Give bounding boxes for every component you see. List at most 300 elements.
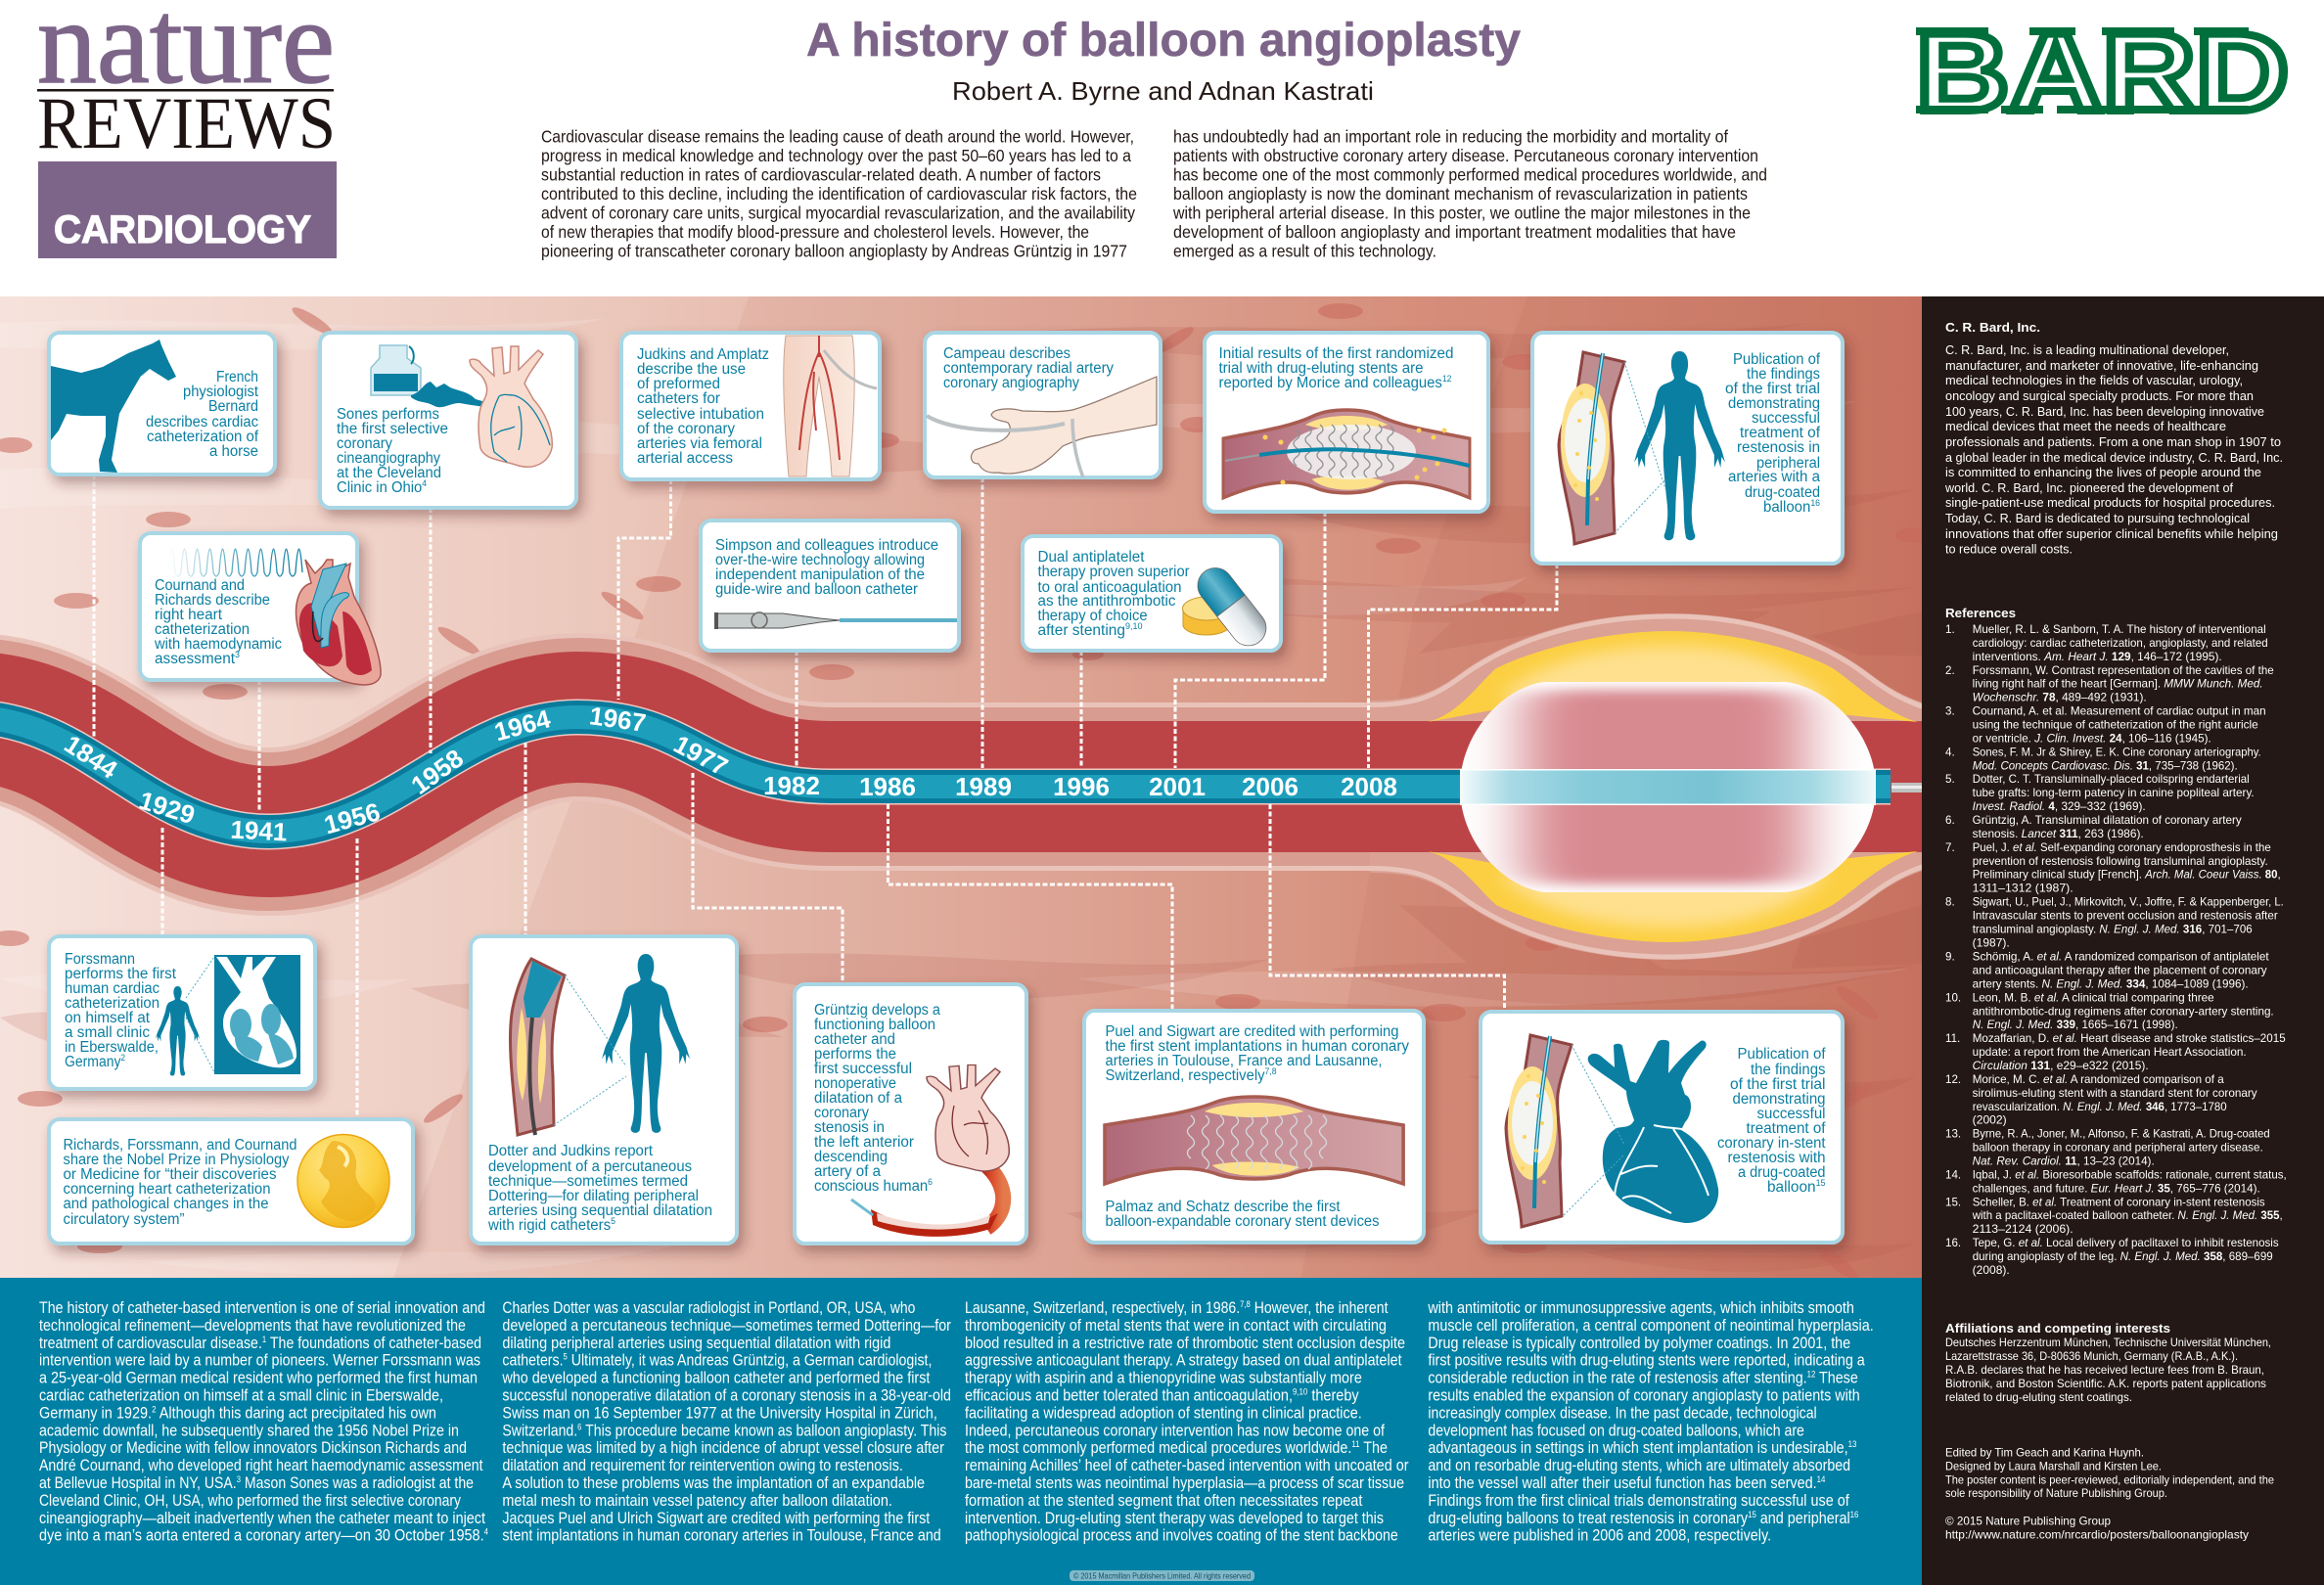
text: Sones caption: coronary <box>337 435 392 452</box>
text: editorial credits <box>1945 1446 2274 1500</box>
text column 4: advantageous in settings in which stent implantation is undesirable, <box>1428 1439 1909 1457</box>
text: Cournand caption: assessment <box>155 651 236 667</box>
text: company profile: medical devices that meet the needs of healthcare <box>1945 420 2226 433</box>
text: Cournand caption: catheterization <box>155 621 250 638</box>
text column 4: considerable reduction in the rate of restenosis after stenting. <box>1428 1370 1865 1387</box>
text: Simpson caption <box>715 537 938 598</box>
text column 2: Swiss man on 16 September 1977 at the University Hospital in Zürich, <box>502 1404 937 1422</box>
text: Morice caption: Initial results of the first randomized <box>1219 345 1454 362</box>
icon: vessel with drug-coated balloon <box>1506 1035 1572 1227</box>
text: Cournand caption: with haemodynamic <box>154 636 282 653</box>
text column 1: at Bellevue Hospital in NY, USA. <box>39 1474 270 1492</box>
title: A history of balloon angioplasty <box>806 15 1521 67</box>
reference list: Schömig, A. et al. A randomized comparison of antiplatelet <box>1973 951 2269 963</box>
text: copyright and URL: © 2015 Nature Publishing Group <box>1945 1515 2111 1528</box>
timeline year labels <box>59 701 1397 847</box>
text: Grüntzig caption: functioning balloon <box>814 1017 935 1033</box>
text: Grüntzig caption: the left anterior <box>814 1134 914 1151</box>
panel: 2006 coronary drug-coated balloon <box>1481 1012 1843 1243</box>
text: introduction: contributed to this decline, including the identification of cardiovascular risk factors, the <box>541 184 1137 204</box>
reference list: (2008). <box>1973 1264 2010 1277</box>
reference list: 6. <box>1945 814 1955 827</box>
text: Sones caption: the first selective <box>337 421 448 437</box>
text: Forssmann caption: a small clinic <box>65 1024 150 1041</box>
text column 1: Mason Sones was a radiologist at the <box>241 1474 474 1492</box>
text: peripheral trial caption: balloon <box>1763 499 1812 516</box>
text: peripheral trial caption: treatment of <box>1740 425 1821 441</box>
timeline year labels: 1996 <box>1053 772 1110 801</box>
text: company profile: Today, C. R. Bard is dedicated to pursuing technological <box>1945 512 2250 525</box>
text: company profile <box>1944 343 2283 556</box>
text: Sones caption: Sones performs <box>337 406 439 423</box>
text column 2: technique was limited by a high incidence of abrupt vessel closure after <box>502 1439 944 1457</box>
artery vessel with lipid plaque <box>0 613 1928 960</box>
panel: 2008 peripheral drug-coated balloon <box>1532 333 1843 564</box>
icon: heart with balloon catheter <box>851 1065 1009 1237</box>
reference list: 5. <box>1945 773 1955 786</box>
text column 4: These <box>1815 1370 1858 1387</box>
text: Morice caption: reported by Morice and colleagues <box>1219 375 1451 391</box>
text column 2: Charles Dotter was a vascular radiologist in Portland, OR, USA, who <box>502 1299 915 1317</box>
text: peripheral trial caption: the findings <box>1747 366 1820 383</box>
text column 3: Lausanne, Switzerland, respectively, in 1986. <box>965 1299 1288 1317</box>
text column 4: 16 <box>1850 1510 1858 1519</box>
panel: 1941 Cournand and Richards <box>140 533 381 685</box>
reference list: 15. <box>1945 1196 1961 1208</box>
text: peripheral trial caption: of the first trial <box>1725 381 1820 397</box>
dotted leader lines <box>186 957 214 1072</box>
reference list: with a paclitaxel-coated balloon catheter. N. Engl. J. Med. 355, <box>1972 1209 2283 1222</box>
timeline connector lines <box>94 475 1557 1119</box>
text: affiliations: related to drug-eluting stent coatings. <box>1945 1391 2132 1404</box>
text column 3: Indeed, percutaneous coronary intervention has now become one of <box>965 1422 1385 1439</box>
text: dual antiplatelet caption: after stenting <box>1037 622 1125 639</box>
text: Dotter caption: arteries using sequential dilatation <box>488 1202 712 1219</box>
text: company profile: manufacturer, and marketer of innovative, life-enhancing <box>1945 359 2258 373</box>
text: Dotter caption <box>487 1143 712 1234</box>
text: introduction <box>541 127 1767 260</box>
reference list: Sigwart, U., Puel, J., Mirkovitch, V., Joffre, F. & Kappenberger, L. <box>1973 896 2284 909</box>
timeline year labels: 1977 <box>669 729 733 782</box>
text: company profile: to reduce overall costs. <box>1945 542 2073 556</box>
reference list: Sones, F. M. Jr & Shirey, E. K. Cine coronary arteriography. <box>1973 746 2261 758</box>
text column 3: 11 <box>1351 1439 1360 1449</box>
text: dual antiplatelet caption: as the antithrombotic <box>1037 593 1176 610</box>
text column 2: 5 <box>564 1352 568 1362</box>
reference list: 3. <box>1945 705 1955 718</box>
text: company profile: is committed to enhancing the lives of people around the <box>1945 466 2261 479</box>
text: Sones caption: cineangiography <box>337 450 440 467</box>
text column 1: 1 <box>262 1335 266 1344</box>
heading: C. R. Bard, Inc.: C. R. Bard, Inc. <box>1945 320 2040 335</box>
text column 1: André Cournand, who developed right heart haemodynamic assessment <box>39 1457 483 1474</box>
text: Forssmann caption: catheterization <box>65 995 159 1012</box>
reference list: prevention of restenosis following transluminal angioplasty. <box>1973 855 2268 868</box>
logo: Nature Reviews Cardiology: REVIEWS <box>37 83 336 164</box>
dotted leader lines <box>554 975 626 1125</box>
text: Judkins caption: catheters for <box>637 390 720 407</box>
text: company profile: world. C. R. Bard, Inc. pioneered the development of <box>1944 481 2234 495</box>
panel: dark sidebar <box>1922 296 2324 1585</box>
reference list <box>1945 623 2287 1277</box>
text: Judkins caption: arteries via femoral <box>637 435 762 452</box>
panel: 2001 Morice drug-eluting stents <box>1205 333 1488 512</box>
icon: vessel with drug-eluting stent <box>1223 410 1470 498</box>
text: horse caption: catheterization of <box>147 429 259 445</box>
text: introduction: balloon angioplasty is now the dominant mechanism of revascularization in patients <box>1173 184 1748 204</box>
text: peripheral trial caption: peripheral <box>1756 455 1820 472</box>
text: introduction: of new therapies that modify blood-pressure and cholesterol levels. However, the <box>541 222 1089 242</box>
text: Grüntzig caption: 6 <box>928 1177 933 1187</box>
text column 2: Jacques Puel and Ulrich Sigwart are credited with performing the first <box>502 1510 931 1527</box>
text: Cournand caption: Richards describe <box>155 592 270 609</box>
reference list: transluminal angioplasty. N. Engl. J. Med. 316, 701–706 <box>1973 924 2253 935</box>
text column 3: blood resulted in a restrictive rate of thrombotic stent occlusion despite <box>965 1335 1405 1352</box>
panel: 1977 Grüntzig <box>795 984 1026 1244</box>
text: Grüntzig caption <box>814 1002 940 1195</box>
text column 4: arteries were published in 2006 and 2008, respectively. <box>1428 1527 1771 1545</box>
text column 3: However, the inherent <box>1251 1299 1389 1317</box>
text: copyright and URL: http://www.nature.com/nrcardio/posters/balloonangioplasty <box>1945 1528 2249 1542</box>
reference list: Wochenschr. 78, 489–492 (1931). <box>1973 692 2147 704</box>
timeline year labels: 1958 <box>405 744 469 800</box>
panel: 1967 Judkins and Amplatz <box>621 333 880 479</box>
text: Grüntzig caption: dilatation of a <box>814 1090 902 1107</box>
text column 4: 14 <box>1817 1474 1825 1484</box>
heading: Affiliations and competing interests: Affiliations and competing interests <box>1945 1321 2170 1336</box>
panel: 1958 Sones cineangiography <box>320 333 576 508</box>
text: Grüntzig caption: catheter and <box>814 1031 895 1048</box>
panel: 1844 horse catheterization <box>49 333 275 475</box>
text column 3: 7,8 <box>1240 1299 1251 1309</box>
text column 1: a 25-year-old German medical resident who performed the first human <box>39 1370 478 1387</box>
text: Nobel caption: concerning heart catheterization <box>63 1181 270 1198</box>
text column 1: cineangiography—albeit inadvertently when the catheter meant to inject <box>39 1510 485 1527</box>
dotted leader lines <box>1615 362 1665 533</box>
reference list: 13. <box>1945 1128 1961 1141</box>
text: introduction: substantial reduction in rates of cardiovascular-related death. A number of factors <box>541 164 1101 184</box>
text column 4: drug-eluting balloons to treat restenosis in coronary <box>1428 1510 1796 1527</box>
text: coronary trial caption: successful <box>1757 1106 1826 1122</box>
reference list: Invest. Radiol. 4, 329–332 (1969). <box>1973 800 2146 813</box>
panel: main body text <box>0 1278 1922 1585</box>
reference list: 1. <box>1945 623 1955 636</box>
text: peripheral trial caption: drug-coated <box>1745 484 1820 501</box>
text: coronary trial caption: restenosis with <box>1728 1150 1826 1166</box>
reference list: Morice, M. C. et al. A randomized comparison of a <box>1973 1073 2224 1086</box>
text column 3: pathophysiological process and involves coating of the stent backbone <box>965 1527 1398 1545</box>
text: peripheral trial caption: successful <box>1752 410 1820 427</box>
icon: small human silhouette <box>156 986 200 1075</box>
inflated balloon <box>1460 682 1876 892</box>
timeline year labels: 2001 <box>1149 772 1206 801</box>
text: company profile: C. R. Bard, Inc. is a leading multinational developer, <box>1945 343 2229 357</box>
icon: vessel with rigid catheter <box>510 959 565 1135</box>
timeline year labels: 1941 <box>230 815 288 847</box>
text: Puel caption <box>1106 1023 1409 1230</box>
text: introduction: has become one of the most commonly performed medical procedures worldwide, and <box>1173 164 1767 184</box>
text: Judkins caption <box>637 346 769 467</box>
text: dual antiplatelet caption: therapy of choice <box>1037 608 1147 624</box>
dotted leader lines <box>1564 1045 1624 1215</box>
text column 1: 3 <box>237 1474 241 1484</box>
text: Dotter caption: 5 <box>611 1216 615 1226</box>
panel: 1929 Forssmann <box>49 936 315 1089</box>
text: coronary trial caption: balloon <box>1767 1179 1816 1196</box>
panel: 1986 Puel and Sigwart <box>1084 1011 1424 1243</box>
text: Grüntzig caption: Grüntzig develops a <box>814 1002 940 1019</box>
text: horse caption: French <box>216 369 258 385</box>
text column 3: efficacious and better tolerated than anticoagulation, <box>965 1387 1339 1405</box>
text: Forssmann caption: Forssmann <box>65 951 135 968</box>
reference list: 2. <box>1945 664 1955 677</box>
text column 4: 15 <box>1748 1510 1756 1519</box>
text: introduction: patients with obstructive coronary artery disease. Percutaneous coronary intervention <box>1173 146 1758 165</box>
text: Puel caption: balloon-expandable coronary stent devices <box>1106 1213 1380 1230</box>
text: introduction: pioneering of transcatheter coronary balloon angioplasty by Andreas Grüntzig in 1977 <box>541 241 1127 260</box>
text: coronary trial caption: coronary in-stent <box>1717 1135 1826 1152</box>
timeline year labels: 2006 <box>1242 772 1299 801</box>
text: horse caption: a horse <box>209 443 258 460</box>
text: horse caption <box>146 369 259 460</box>
reference list: balloon therapy in coronary and peripheral artery disease. <box>1973 1142 2263 1155</box>
reference list: (2002) <box>1973 1114 2007 1127</box>
reference list: (1987). <box>1973 936 2010 949</box>
text: editorial credits: sole responsibility of Nature Publishing Group. <box>1945 1487 2167 1500</box>
text: affiliations: Lazarettstrasse 36, D-80636 Munich, Germany (R.A.B., A.K.). <box>1945 1350 2238 1363</box>
reference list: Mueller, R. L. & Sanborn, T. A. The history of interventional <box>1973 623 2266 636</box>
reference list: during angioplasty of the leg. N. Engl. J. Med. 358, 689–699 <box>1973 1250 2273 1263</box>
text: dual antiplatelet caption: Dual antiplatelet <box>1037 549 1145 566</box>
reference list: using the technique of catheterization of the right auricle <box>1973 718 2258 732</box>
reference list: update: a report from the American Heart Association. <box>1973 1046 2247 1059</box>
timeline year labels: 1967 <box>588 701 648 738</box>
icon: heart X-ray inset <box>214 955 300 1074</box>
text: Grüntzig caption: descending <box>814 1149 888 1165</box>
text column 1: Although this daring act precipitated his own <box>156 1404 436 1422</box>
logo: Nature Reviews Cardiology <box>37 0 337 258</box>
reference list: living right half of the heart [German]. MMW Munch. Med. <box>1973 678 2263 691</box>
text: horse caption: Bernard <box>208 398 258 415</box>
text column 1: treatment of cardiovascular disease. <box>39 1335 298 1352</box>
text: Nobel caption: Richards, Forssmann, and Cournand <box>63 1137 297 1154</box>
text: Grüntzig caption: nonoperative <box>814 1075 896 1092</box>
icon: pressure waveform <box>168 549 302 576</box>
text column 2: This procedure became known as balloon angioplasty. This <box>581 1422 946 1439</box>
icon: yellow tablet <box>1182 597 1231 635</box>
background tissue panel <box>0 296 1935 1284</box>
reference list: 12. <box>1945 1073 1961 1086</box>
timeline year labels: 1929 <box>136 786 199 830</box>
text: Cournand caption: right heart <box>155 607 223 623</box>
panel: 1989 Campeau radial angiography <box>925 333 1161 477</box>
timeline year labels: 1844 <box>59 729 123 785</box>
icon: teal and white capsule <box>1191 561 1273 653</box>
icon: vessel with drug-coated balloon <box>1559 352 1624 544</box>
text column 4: increasingly complex disease. In the past decade, technological <box>1428 1404 1817 1422</box>
text column 3: bare-metal stents was neointimal hyperplasia—a process of scar tissue <box>965 1474 1404 1492</box>
text: editorial credits: Designed by Laura Marshall and Kirsten Lee. <box>1945 1460 2162 1473</box>
text: Grüntzig caption: coronary <box>814 1105 869 1121</box>
text column 1: dye into a man’s aorta entered a coronary artery—on 30 October 1958. <box>39 1527 547 1545</box>
timeline year labels: 1982 <box>763 771 820 800</box>
text column 3: the most commonly performed medical procedures worldwide. <box>965 1439 1409 1457</box>
text column 3: remaining Achilles’ heel of catheter-based intervention with uncoated or <box>965 1457 1409 1474</box>
text column 2: dilatation and requirement for reintervention owing to restenosis. <box>502 1457 903 1474</box>
reference list: 16. <box>1945 1237 1961 1249</box>
authors: Robert A. Byrne and Adnan Kastrati <box>952 76 1374 106</box>
reference list: challenges, and future. Eur. Heart J. 35, 765–776 (2014). <box>1973 1182 2260 1195</box>
text: Sones caption <box>337 406 448 496</box>
text column 4: Drug release is typically controlled by polymer coatings. In 2001, the <box>1428 1335 1850 1352</box>
text column 3: The <box>1360 1439 1388 1457</box>
reference list: artery stents. N. Engl. J. Med. 334, 1084–1089 (1996). <box>1973 977 2249 990</box>
text column 1: Germany in 1929. <box>39 1404 167 1422</box>
text column 2: A solution to these problems was the implantation of an expandable <box>502 1474 925 1492</box>
text column 1: The history of catheter-based intervention is one of serial innovation and <box>39 1299 485 1317</box>
text: coronary trial caption: a drug-coated <box>1738 1164 1826 1181</box>
text: Puel caption: 7,8 <box>1265 1066 1276 1076</box>
text: Forssmann caption: performs the first <box>65 966 177 982</box>
text: affiliations: Biotronik, and Boston Scientific. A.K. reports patent applications <box>1945 1378 2266 1390</box>
reference list: Forssmann, W. Contrast representation of the cavities of the <box>1973 664 2274 677</box>
logo: Nature Reviews Cardiology: CARDIOLOGY <box>54 208 311 251</box>
text column 3: 9,10 <box>1293 1387 1307 1397</box>
text: company profile: 100 years, C. R. Bard, Inc. has been developing innovative <box>1945 405 2264 419</box>
timeline year labels: 1986 <box>859 772 916 801</box>
text: company profile: a global leader in the medical device industry, C. R. Bard, Inc. <box>1945 451 2283 465</box>
text: horse caption: physiologist <box>183 384 259 400</box>
icon: teal heart <box>1588 1040 1718 1223</box>
text: Grüntzig caption: performs the <box>814 1046 896 1063</box>
panel: 1964 Dotter and Judkins <box>471 936 737 1244</box>
reference list: Grüntzig, A. Transluminal dilatation of coronary artery <box>1973 814 2242 827</box>
text column 4: muscle cell proliferation, a central component of neointimal hyperplasia. <box>1428 1317 1874 1335</box>
text: Nobel caption <box>63 1137 297 1228</box>
reference list: sirolimus-eluting stent with a standard stent for coronary <box>1973 1087 2257 1100</box>
text: company profile: oncology and surgical specialty products. For more than <box>1945 389 2254 403</box>
text column 3: therapy with aspirin and a thienopyridine was substantially more <box>965 1370 1362 1387</box>
text: dual antiplatelet caption: to oral anticoagulation <box>1037 579 1182 596</box>
text: introduction: emerged as a result of this technology. <box>1173 241 1436 260</box>
text column 1: The foundations of catheter-based <box>266 1335 481 1352</box>
text column 2: metal mesh to maintain vessel patency after balloon dilatation. <box>502 1492 892 1510</box>
text: horse caption: describes cardiac <box>146 414 258 430</box>
text: Sones caption: at the Cleveland <box>337 465 441 481</box>
text column 2: catheters. <box>502 1352 573 1370</box>
text: Nobel caption: circulatory system” <box>63 1211 184 1228</box>
text: peripheral trial caption: demonstrating <box>1728 395 1820 412</box>
text: Dotter caption: Dottering—for dilating peripheral <box>488 1188 699 1204</box>
text column 1: 2 <box>152 1404 156 1414</box>
reference list: 1311–1312 (1987). <box>1973 883 2073 895</box>
reference list: Scheller, B. et al. Treatment of coronary in-stent restenosis <box>1973 1196 2265 1208</box>
text column 1: intervention were laid by a number of pioneers. Werner Forssmann was <box>39 1352 480 1370</box>
text: Dotter caption: Dotter and Judkins report <box>488 1143 654 1159</box>
text column 2 <box>502 1299 951 1545</box>
text column 3: formation at the stented segment that often necessitates repeat <box>965 1492 1363 1510</box>
text: Simpson caption: Simpson and colleagues introduce <box>715 537 938 554</box>
icon: hand with radial catheter <box>927 377 1157 477</box>
text: company profile: single-patient-use medical products for hospital procedures. <box>1945 496 2275 510</box>
heading: References: References <box>1945 606 2016 620</box>
timeline year labels: 1989 <box>955 772 1012 801</box>
icon: legs with femoral arteries <box>784 336 877 476</box>
text column 2: stent implantations in human coronary arteries in Toulouse, France and <box>502 1527 941 1545</box>
copyright pill: © 2015 Macmillan Publishers Limited. All rights reserved <box>1073 1571 1251 1581</box>
reference list: Tepe, G. et al. Local delivery of paclitaxel to inhibit restenosis <box>1973 1237 2279 1249</box>
text: Sones caption: Clinic in Ohio <box>337 479 426 496</box>
timeline year labels: 1956 <box>321 796 383 839</box>
text: company profile: innovations that offer superior clinical benefits while helping <box>1945 527 2278 541</box>
text: Grüntzig caption: artery of a <box>814 1163 881 1180</box>
text: coronary trial caption: demonstrating <box>1732 1091 1826 1108</box>
text: Simpson caption: guide-wire and balloon catheter <box>715 581 918 598</box>
text column 1: Cleveland Clinic, OH, USA, who performed the first selective coronary <box>39 1492 462 1510</box>
text: introduction: advent of coronary care units, surgical myocardial revascularization, and the availability <box>541 204 1135 223</box>
text: Forssmann caption: Germany <box>65 1054 127 1070</box>
reference list: Iqbal, J. et al. Bioresorbable scaffolds: rationale, current status, <box>1973 1168 2287 1181</box>
text: company profile: medical technologies in the fields of vascular, urology, <box>1945 374 2243 387</box>
icon: pink heart with coronary arteries <box>470 346 552 467</box>
icon: gold Nobel medal <box>297 1135 389 1227</box>
reference list: Byrne, R. A., Joner, M., Alfonso, F. & Kastrati, A. Drug-coated <box>1973 1128 2270 1141</box>
text: peripheral trial caption: arteries with a <box>1728 469 1820 485</box>
reference list: Circulation 131, e29–e322 (2015). <box>1973 1060 2149 1072</box>
text column 3: facilitating a widespread adoption of stenting in clinical practice. <box>965 1404 1362 1422</box>
text column 1: cardiac catheterization on himself at a small clinic in Eberswalde, <box>39 1387 443 1405</box>
reference list: Leon, M. B. et al. A clinical trial comparing three <box>1973 991 2214 1004</box>
text: peripheral trial caption <box>1725 351 1821 516</box>
text: editorial credits: The poster content is peer-reviewed, editorially independent, and the <box>1945 1473 2274 1487</box>
reference list: or ventricle. J. Clin. Invest. 24, 106–116 (1945). <box>1973 732 2211 745</box>
reference list: revascularization. N. Engl. J. Med. 346, 1773–1780 <box>1973 1101 2227 1113</box>
text column 4: development has focused on drug-coated balloons, which are <box>1428 1422 1804 1439</box>
text column 4: Findings from the first clinical trials demonstrating successful use of <box>1428 1492 1849 1510</box>
icon: human silhouette <box>1634 351 1725 540</box>
icon: horse silhouette <box>51 340 176 473</box>
text: Puel caption: the first stent implantations in human coronary <box>1106 1038 1409 1055</box>
panel: 1982 Simpson over-the-wire <box>701 521 959 651</box>
text column 2: Switzerland. <box>502 1422 590 1439</box>
text: coronary trial caption: 15 <box>1816 1178 1826 1188</box>
text column 2: successful nonoperative dilatation of a coronary stenosis in a 38-year-old <box>502 1387 951 1405</box>
text: introduction: development of balloon angioplasty and important treatment modalities that have <box>1173 222 1736 242</box>
text: Dotter caption: with rigid catheters <box>488 1217 615 1234</box>
text: Dotter caption: technique—sometimes termed <box>488 1173 688 1190</box>
text column 1 <box>39 1299 488 1545</box>
text column 4: with antimitotic or immunosuppressive agents, which inhibits smooth <box>1428 1299 1854 1317</box>
reference list: Mozaffarian, D. et al. Heart disease and stroke statistics–2015 <box>1973 1032 2286 1045</box>
text: dual antiplatelet caption: therapy proven superior <box>1037 564 1190 580</box>
text: Puel caption: Puel and Sigwart are credited with performing <box>1106 1023 1399 1040</box>
reference list: Nat. Rev. Cardiol. 11, 13–23 (2014). <box>1973 1155 2155 1168</box>
text: Judkins caption: of preformed <box>637 376 720 392</box>
text: dual antiplatelet caption: 9,10 <box>1125 621 1143 631</box>
text: Nobel caption: and pathological changes in the <box>63 1196 268 1212</box>
text: peripheral trial caption: Publication of <box>1733 351 1821 368</box>
reference list: Mod. Concepts Cardiovasc. Dis. 31, 735–738 (1962). <box>1973 759 2238 772</box>
text: Sones caption: 4 <box>422 478 427 488</box>
text: copyright and URL <box>1945 1515 2249 1542</box>
icon: ink bottle and ink splash <box>371 345 501 409</box>
text column 1: academic downfall, he subsequently shared the 1956 Nobel Prize in <box>39 1422 459 1439</box>
reference list: interventions. Am. Heart J. 129, 146–172 (1995). <box>1973 651 2222 663</box>
text: affiliations: R.A.B. declares that he has received lecture fees from B. Braun, <box>1945 1364 2264 1377</box>
text column 3: thereby <box>1307 1387 1359 1405</box>
text: peripheral trial caption: restenosis in <box>1737 439 1820 456</box>
text: dual antiplatelet caption <box>1037 549 1190 639</box>
